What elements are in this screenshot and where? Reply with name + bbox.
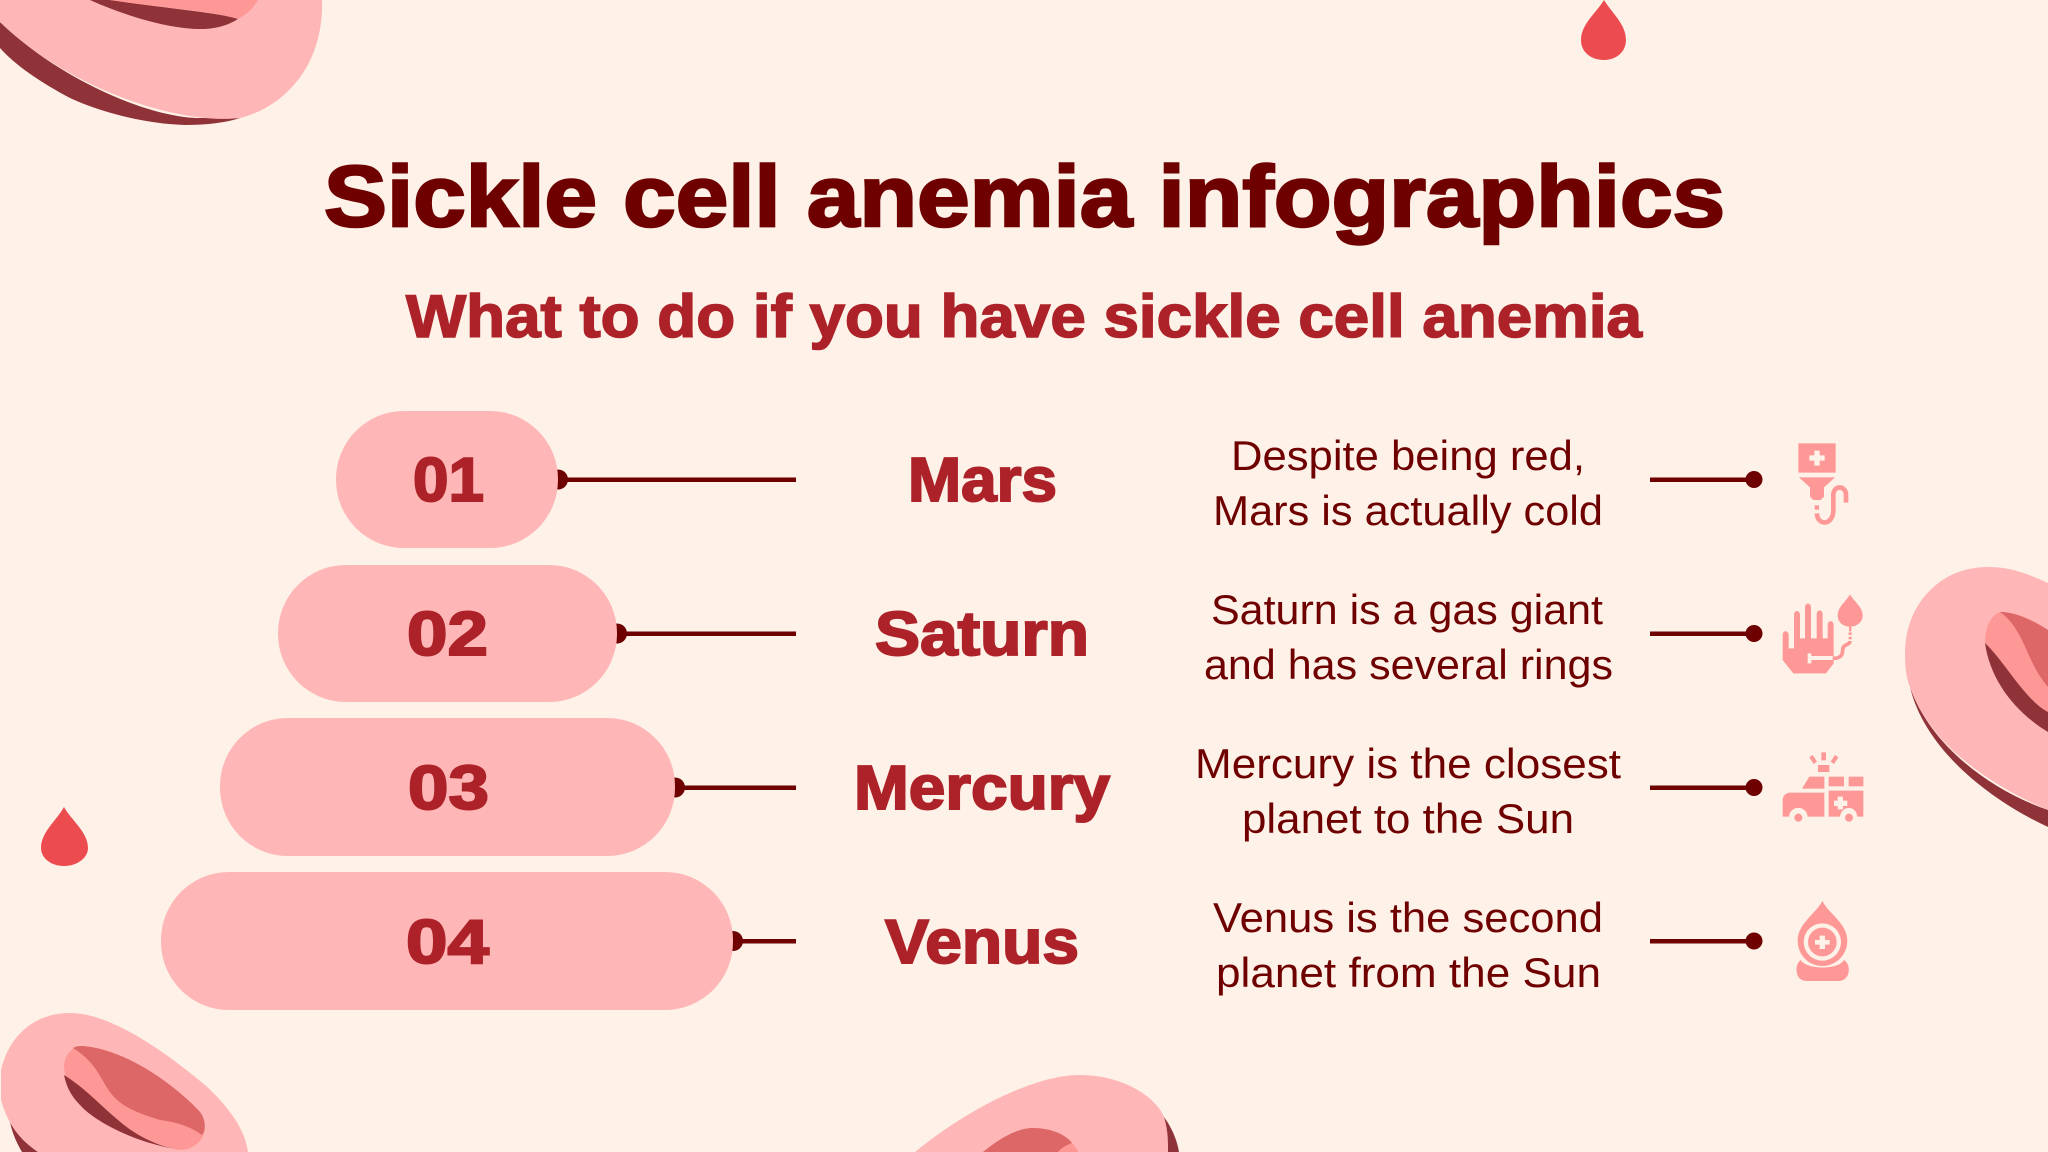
subtitle: What to do if you have sickle cell anemia xyxy=(406,283,1643,350)
row 01: Mars xyxy=(336,411,1846,548)
pill 01 xyxy=(336,411,558,548)
row 02: Saturn xyxy=(278,565,1863,702)
label Venus: Venus xyxy=(885,908,1079,977)
label Saturn: Saturn xyxy=(875,600,1089,669)
decoration: top-left blood cell xyxy=(0,0,322,125)
connector to icon 01 xyxy=(1650,471,1762,488)
row 03: Mercury xyxy=(220,718,1863,856)
title: Sickle cell anemia infographics xyxy=(324,149,1725,245)
number 02: 02 xyxy=(407,600,488,669)
pill 02 xyxy=(278,565,617,702)
row 04: Venus xyxy=(161,872,1849,1010)
icon: hand with blood drip xyxy=(1783,594,1863,673)
connector 03 xyxy=(665,778,796,798)
number 03: 03 xyxy=(408,754,489,823)
label Mars: Mars xyxy=(908,446,1057,515)
description Mercury xyxy=(1195,740,1621,842)
connector to icon 04 xyxy=(1650,932,1762,950)
number 01: 01 xyxy=(413,446,484,515)
decoration: bottom-centre blood cell xyxy=(915,1075,1179,1152)
description Mars: Despite being red, xyxy=(1231,432,1585,479)
decoration: right blood cell xyxy=(1905,567,2048,827)
icon: blood drop with cross xyxy=(1796,901,1849,981)
description Venus: planet from the Sun xyxy=(1216,949,1601,996)
pill 04 xyxy=(161,872,733,1010)
connector 02 xyxy=(607,624,796,644)
description Saturn: Saturn is a gas giant xyxy=(1211,586,1603,633)
description Saturn xyxy=(1204,586,1613,688)
label Mercury: Mercury xyxy=(854,754,1111,823)
icon: IV blood bag xyxy=(1798,443,1846,522)
description Mercury: planet to the Sun xyxy=(1242,795,1574,842)
number 04: 04 xyxy=(406,908,490,977)
icon: ambulance xyxy=(1783,752,1863,822)
connector to icon 02 xyxy=(1650,625,1762,642)
decoration: bottom-left blood cell xyxy=(1,1013,248,1152)
connector 04 xyxy=(723,931,796,951)
connector to icon 03 xyxy=(1650,779,1762,796)
connector 01 xyxy=(548,470,796,490)
description Saturn: and has several rings xyxy=(1204,641,1613,688)
description Mars: Mars is actually cold xyxy=(1213,487,1603,534)
decoration: top blood drop xyxy=(1581,0,1626,60)
description Mars xyxy=(1213,432,1603,534)
decoration: left blood drop xyxy=(41,807,88,866)
description Venus xyxy=(1213,894,1603,996)
description Venus: Venus is the second xyxy=(1213,894,1603,941)
pill 03 xyxy=(220,718,675,856)
description Mercury: Mercury is the closest xyxy=(1195,740,1621,787)
